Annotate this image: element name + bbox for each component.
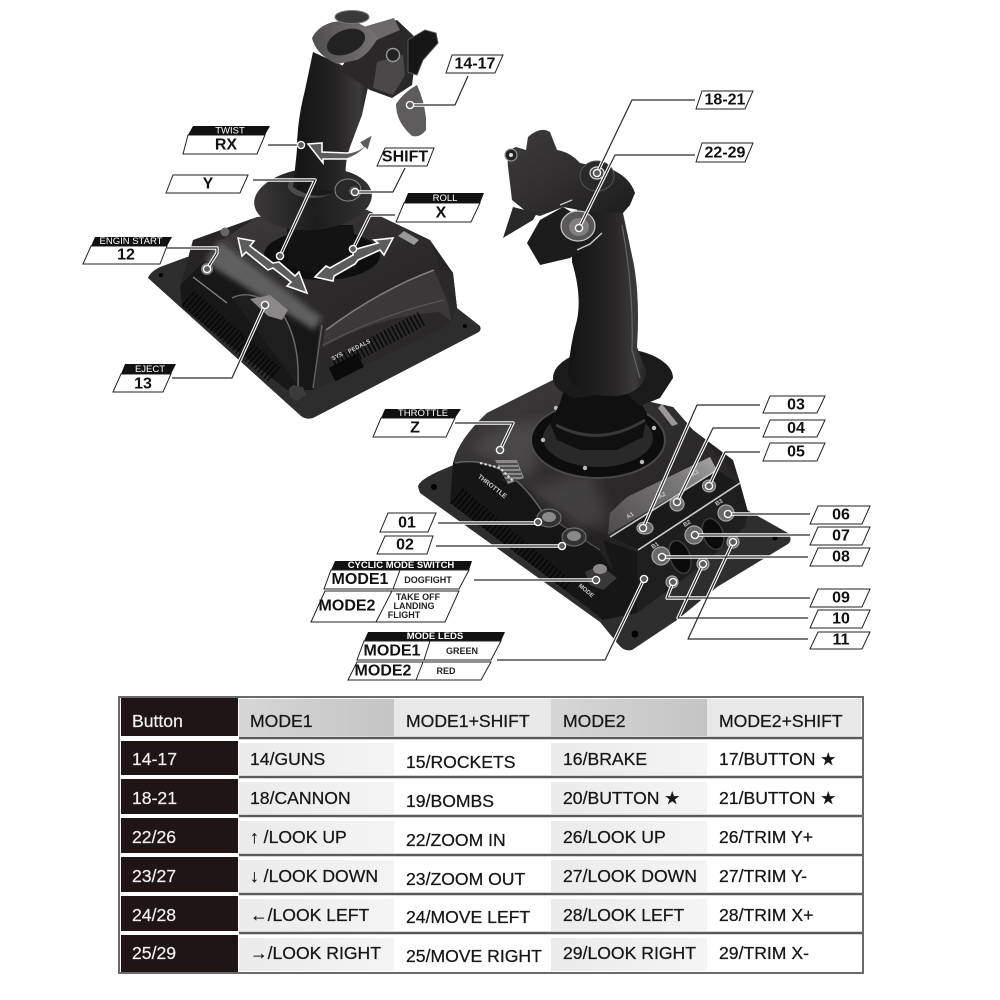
left base ports and details: PEDALS xyxy=(347,339,372,355)
row 14-17: 14-17 xyxy=(132,749,177,769)
panel button captions: A2 xyxy=(658,491,668,501)
mode1 green row: GREEN xyxy=(446,646,478,656)
label 07: 07 xyxy=(832,528,850,544)
label 01 xyxy=(380,513,436,532)
left joystick xyxy=(148,10,481,419)
panel button captions: A1 xyxy=(626,511,636,521)
button mapping table xyxy=(119,697,863,973)
row 25/29: 25/MOVE RIGHT xyxy=(406,946,542,966)
label 10 xyxy=(810,610,870,628)
row 18-21: 21/BUTTON ★ xyxy=(719,788,836,808)
label 10: 10 xyxy=(832,610,850,628)
right base vents xyxy=(456,497,566,590)
mode2 take off landing flight row: LANDING xyxy=(394,601,434,611)
label twist RX xyxy=(183,126,270,154)
label engine start 12: 12 xyxy=(117,246,135,264)
cyclic mode switch legend xyxy=(311,560,472,622)
row 25/29: 29/LOOK RIGHT xyxy=(563,943,696,963)
row 23/27: 23/27 xyxy=(132,866,176,886)
label 05: 05 xyxy=(787,444,805,460)
row 24/28: 24/MOVE LEFT xyxy=(406,907,530,927)
row 25/29 xyxy=(121,935,809,972)
label 11: 11 xyxy=(833,632,850,648)
row 25/29: →/LOOK RIGHT xyxy=(250,943,381,963)
left grip head xyxy=(312,10,438,98)
row 14-17 xyxy=(121,741,836,775)
row 22/26: ↑ /LOOK UP xyxy=(250,827,347,847)
label roll X: X xyxy=(436,204,447,222)
panel button captions: B1 xyxy=(651,541,661,551)
label throttle Z: THROTTLE xyxy=(398,408,448,419)
label 01: 01 xyxy=(398,514,416,532)
LEDs header: MODE LEDS xyxy=(407,631,463,642)
label eject 13: EJECT xyxy=(135,364,165,375)
label 08: 08 xyxy=(832,548,850,566)
mode2 red row xyxy=(348,662,491,680)
label 22-29: 22-29 xyxy=(705,144,746,162)
LEDs header xyxy=(364,631,505,642)
label roll X: ROLL xyxy=(433,193,457,204)
row 22/26: 22/ZOOM IN xyxy=(406,830,506,850)
label 22-29 xyxy=(696,143,753,162)
row 23/27: 23/ZOOM OUT xyxy=(406,869,526,889)
mode1 green row: MODE1 xyxy=(364,642,421,660)
right base screw holes xyxy=(431,484,778,638)
row 22/26: 26/TRIM Y+ xyxy=(719,827,813,847)
row 25/29: 25/29 xyxy=(132,943,176,963)
row 23/27: 27/LOOK DOWN xyxy=(563,866,697,886)
label 04 xyxy=(763,420,825,437)
row 23/27: 27/TRIM Y- xyxy=(719,866,807,886)
label eject 13 xyxy=(113,364,176,392)
label Y: Y xyxy=(203,176,214,192)
mode2 take off landing flight row: TAKE OFF xyxy=(396,592,441,602)
right boot xyxy=(550,380,647,450)
row 18-21 xyxy=(121,779,836,814)
throttle wheel: THROTTLE xyxy=(476,473,508,501)
label roll X xyxy=(396,193,484,222)
right trigger xyxy=(503,207,537,238)
right gimbal ring xyxy=(531,402,665,478)
label 11 xyxy=(810,632,870,649)
label 05 xyxy=(763,443,825,461)
left base ports and details xyxy=(159,228,467,401)
row 18-21: 18-21 xyxy=(132,788,177,808)
left mounting plate xyxy=(148,257,481,419)
shift button xyxy=(335,179,361,201)
header row: MODE1 xyxy=(250,711,313,731)
left base vents xyxy=(188,298,423,376)
right base body xyxy=(450,380,748,620)
row 24/28: 28/LOOK LEFT xyxy=(563,905,685,925)
paddle trigger xyxy=(396,85,426,136)
throttle wheel xyxy=(476,460,524,501)
header row: MODE1+SHIFT xyxy=(406,711,530,731)
panel button captions: B3 xyxy=(715,498,725,508)
label 09 xyxy=(810,589,870,607)
label 06 xyxy=(810,506,870,524)
right base edge highlights xyxy=(455,462,740,550)
top hat xyxy=(580,161,614,191)
panel button captions: A3 xyxy=(691,469,701,479)
label 09: 09 xyxy=(832,590,850,606)
label throttle Z: Z xyxy=(410,420,420,436)
mode1 dogfight row: MODE1 xyxy=(332,571,389,588)
label 07 xyxy=(810,527,870,545)
label engine start 12: ENGIN START xyxy=(100,236,163,247)
row 18-21: 19/BOMBS xyxy=(406,791,494,811)
panel buttons xyxy=(637,480,739,588)
panel button captions: B2 xyxy=(683,519,693,529)
mode1 dogfight row: DOGFIGHT xyxy=(404,575,452,585)
label 02: 02 xyxy=(396,536,414,554)
row 23/27 xyxy=(121,857,807,892)
row 23/27: ↓ /LOOK DOWN xyxy=(250,866,378,886)
label Y xyxy=(166,175,248,193)
header row: MODE2 xyxy=(563,711,626,731)
front buttons: MODE xyxy=(577,583,594,599)
row 22/26: 26/LOOK UP xyxy=(563,827,666,847)
label throttle Z xyxy=(373,408,461,437)
right disc xyxy=(553,348,673,406)
label 14-17 xyxy=(446,55,503,73)
label 02 xyxy=(377,536,433,554)
axis arrow X xyxy=(315,238,393,281)
right grip head xyxy=(508,130,635,216)
left stick disc and neck xyxy=(252,150,374,274)
mode1 green row xyxy=(357,641,501,660)
left stick lower gimbal xyxy=(264,230,380,280)
row 14-17: 17/BUTTON ★ xyxy=(719,749,836,769)
label 18-21 xyxy=(696,91,753,109)
panel ovals xyxy=(665,516,728,576)
label 06: 06 xyxy=(832,506,850,524)
label 08 xyxy=(810,548,870,566)
right grip xyxy=(568,165,647,396)
axis arrow Y xyxy=(238,238,307,293)
label twist RX: TWIST xyxy=(215,126,245,136)
label 18-21: 18-21 xyxy=(705,92,746,108)
header row xyxy=(121,698,861,736)
row 25/29: 29/TRIM X- xyxy=(719,943,809,963)
right joystick xyxy=(418,130,790,650)
front buttons xyxy=(537,509,617,599)
panel button captions xyxy=(626,469,725,551)
mode2 red row: MODE2 xyxy=(355,662,412,680)
right mounting plate xyxy=(418,458,790,650)
row 14-17: 16/BRAKE xyxy=(563,749,647,769)
row 18-21: 20/BUTTON ★ xyxy=(563,788,680,808)
mode2 take off landing flight row xyxy=(311,591,459,622)
row 24/28: 28/TRIM X+ xyxy=(719,905,813,925)
left grip xyxy=(297,52,370,190)
left base body xyxy=(180,210,457,390)
mode2 take off landing flight row: MODE2 xyxy=(319,598,376,614)
label engine start 12 xyxy=(83,236,172,264)
row 14-17: 15/ROCKETS xyxy=(406,752,516,772)
mode LEDs legend xyxy=(348,631,505,680)
label twist RX: RX xyxy=(215,136,237,154)
flip switch xyxy=(505,149,517,161)
row 14-17: 14/GUNS xyxy=(250,749,325,769)
row 24/28: 24/28 xyxy=(132,905,176,925)
mode2 take off landing flight row: FLIGHT xyxy=(388,610,421,620)
mode1 dogfight row xyxy=(324,570,469,589)
cyclic header: CYCLIC MODE SWITCH xyxy=(348,560,454,571)
row 24/28 xyxy=(121,896,813,931)
row 22/26 xyxy=(121,818,813,853)
twist arrow xyxy=(308,134,373,163)
mode2 red row: RED xyxy=(436,666,456,676)
leader lines xyxy=(167,76,810,660)
header row: Button xyxy=(132,711,183,731)
row 22/26: 22/26 xyxy=(132,827,176,847)
label 03: 03 xyxy=(787,396,805,414)
hat cylinder xyxy=(527,200,602,265)
label 03 xyxy=(763,396,825,414)
label shift: SHIFT xyxy=(382,148,428,166)
row 24/28: ←/LOOK LEFT xyxy=(250,905,370,925)
label eject 13: 13 xyxy=(134,376,152,392)
label 04: 04 xyxy=(787,420,805,437)
row 18-21: 18/CANNON xyxy=(250,788,351,808)
label 14-17: 14-17 xyxy=(455,56,496,72)
left base ports and details: SYS xyxy=(331,352,344,363)
header row: MODE2+SHIFT xyxy=(719,711,843,731)
